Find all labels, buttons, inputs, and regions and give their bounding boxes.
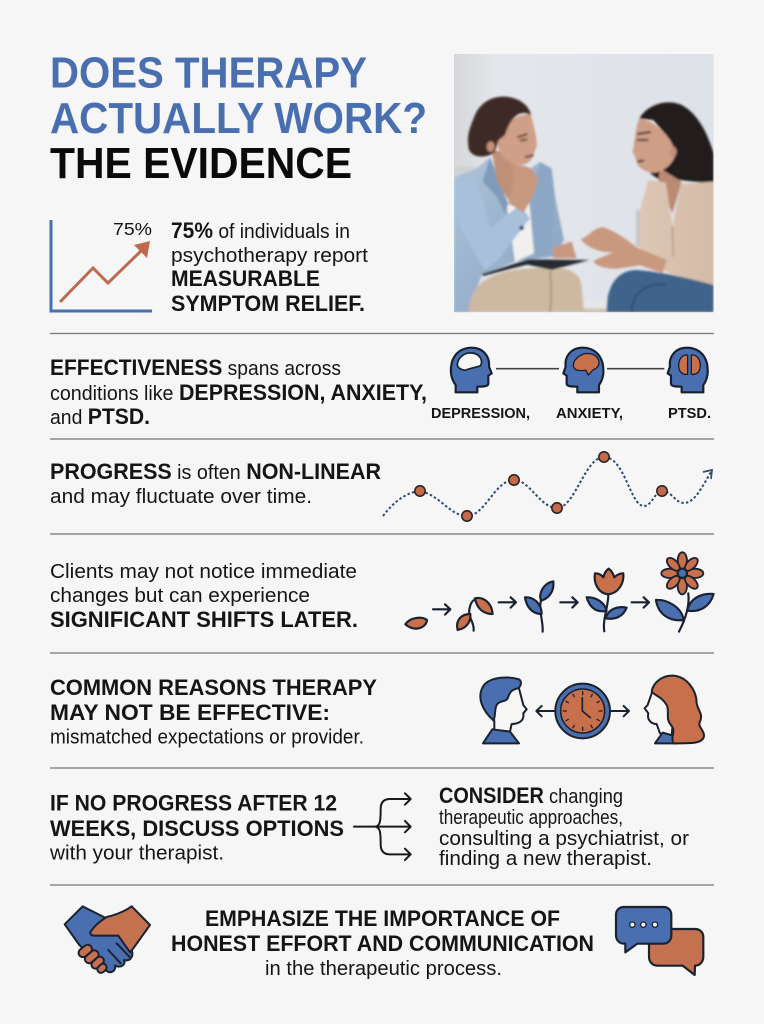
title: ACTUALLY WORK? [50,95,427,143]
effectiveness text: conditions like DEPRESSION, ANXIETY, [50,380,427,405]
stat text: MEASURABLE [171,266,320,291]
left woman: blazer [454,157,564,312]
icon: head anxiety [563,348,603,392]
branching arrows [354,793,411,860]
reasons text [50,675,377,748]
twelve-week guidance text: WEEKS, DISCUSS OPTIONS [50,816,344,841]
mismatch icon: man, clock, woman [480,676,704,743]
right woman: hands and arm [581,227,667,273]
arrow [632,597,649,608]
icon: seed [405,618,427,629]
progress text [50,459,381,508]
twelve-week guidance text: with your therapist. [49,842,224,864]
effectiveness text: and PTSD. [50,404,150,429]
icon: speech bubbles [616,907,703,975]
progress text: and may fluctuate over time. [50,486,312,508]
icon: head depression [451,348,492,392]
condition heads with brain icons: PTSD. [668,406,711,422]
stat text [171,218,368,316]
consider options text: CONSIDER changing [439,783,623,808]
title: DOES THERAPY [50,50,367,98]
effectiveness text: EFFECTIVENESS spans across [50,355,341,380]
arrow [560,597,578,608]
non-linear progress line chart [383,452,712,521]
progress text: PROGRESS is often NON-LINEAR [50,459,381,484]
arrow left [536,706,556,716]
closing statement: EMPHASIZE THE IMPORTANCE OF [205,906,560,931]
right woman: hair and face [639,102,714,184]
arrow [433,604,450,615]
icon: budding tulip [587,569,627,631]
closing statement: HONEST EFFORT AND COMMUNICATION [171,931,594,956]
closing statement [171,906,594,980]
consider options text: finding a new therapist. [439,848,652,870]
stat chart icon: 75% rising arrow [51,219,152,311]
right woman: blouse [640,180,714,285]
arrow right [610,706,629,716]
photo: therapist and client in conversation [454,54,714,313]
delayed change text: changes but can experience [50,585,310,607]
left woman: trousers, clipboard, hand [468,267,584,312]
closing statement: in the therapeutic process. [265,958,502,980]
left woman: neck, hand, face [492,150,517,203]
icon: head ptsd [668,348,708,392]
icon: handshake [65,906,150,974]
arrow [499,597,516,608]
stat chart icon: 75% rising arrow: 75% [113,219,152,239]
condition heads with brain icons: DEPRESSION, [431,406,530,422]
stat text: psychotherapy report [171,245,368,267]
stat text: 75% of individuals in [171,218,350,243]
consider options text: consulting a psychiatrist, or [439,828,689,850]
icon: seedling [525,581,553,632]
stat text: SYMPTOM RELIEF. [171,291,365,316]
icon: man profile [480,677,527,743]
condition heads with brain icons [431,348,711,422]
title [50,50,427,188]
icon: woman profile [645,676,704,743]
reasons text: COMMON REASONS THERAPY [50,675,377,700]
consider options text: therapeutic approaches, [439,807,623,829]
icon: flower in bloom [656,552,714,632]
plant growth sequence [405,552,714,632]
icon: sprout [457,598,493,631]
delayed change text: Clients may not notice immediate [50,561,357,583]
reasons text: mismatched expectations or provider. [50,726,364,748]
twelve-week guidance text [49,790,344,864]
delayed change text [50,561,358,632]
twelve-week guidance text: IF NO PROGRESS AFTER 12 [50,790,337,816]
title: THE EVIDENCE [50,140,352,188]
icon: clock [555,684,610,738]
reasons text: MAY NOT BE EFFECTIVE: [50,700,330,725]
condition heads with brain icons: ANXIETY, [556,406,623,422]
delayed change text: SIGNIFICANT SHIFTS LATER. [50,607,358,632]
effectiveness text [50,355,427,429]
consider options text [439,783,689,870]
